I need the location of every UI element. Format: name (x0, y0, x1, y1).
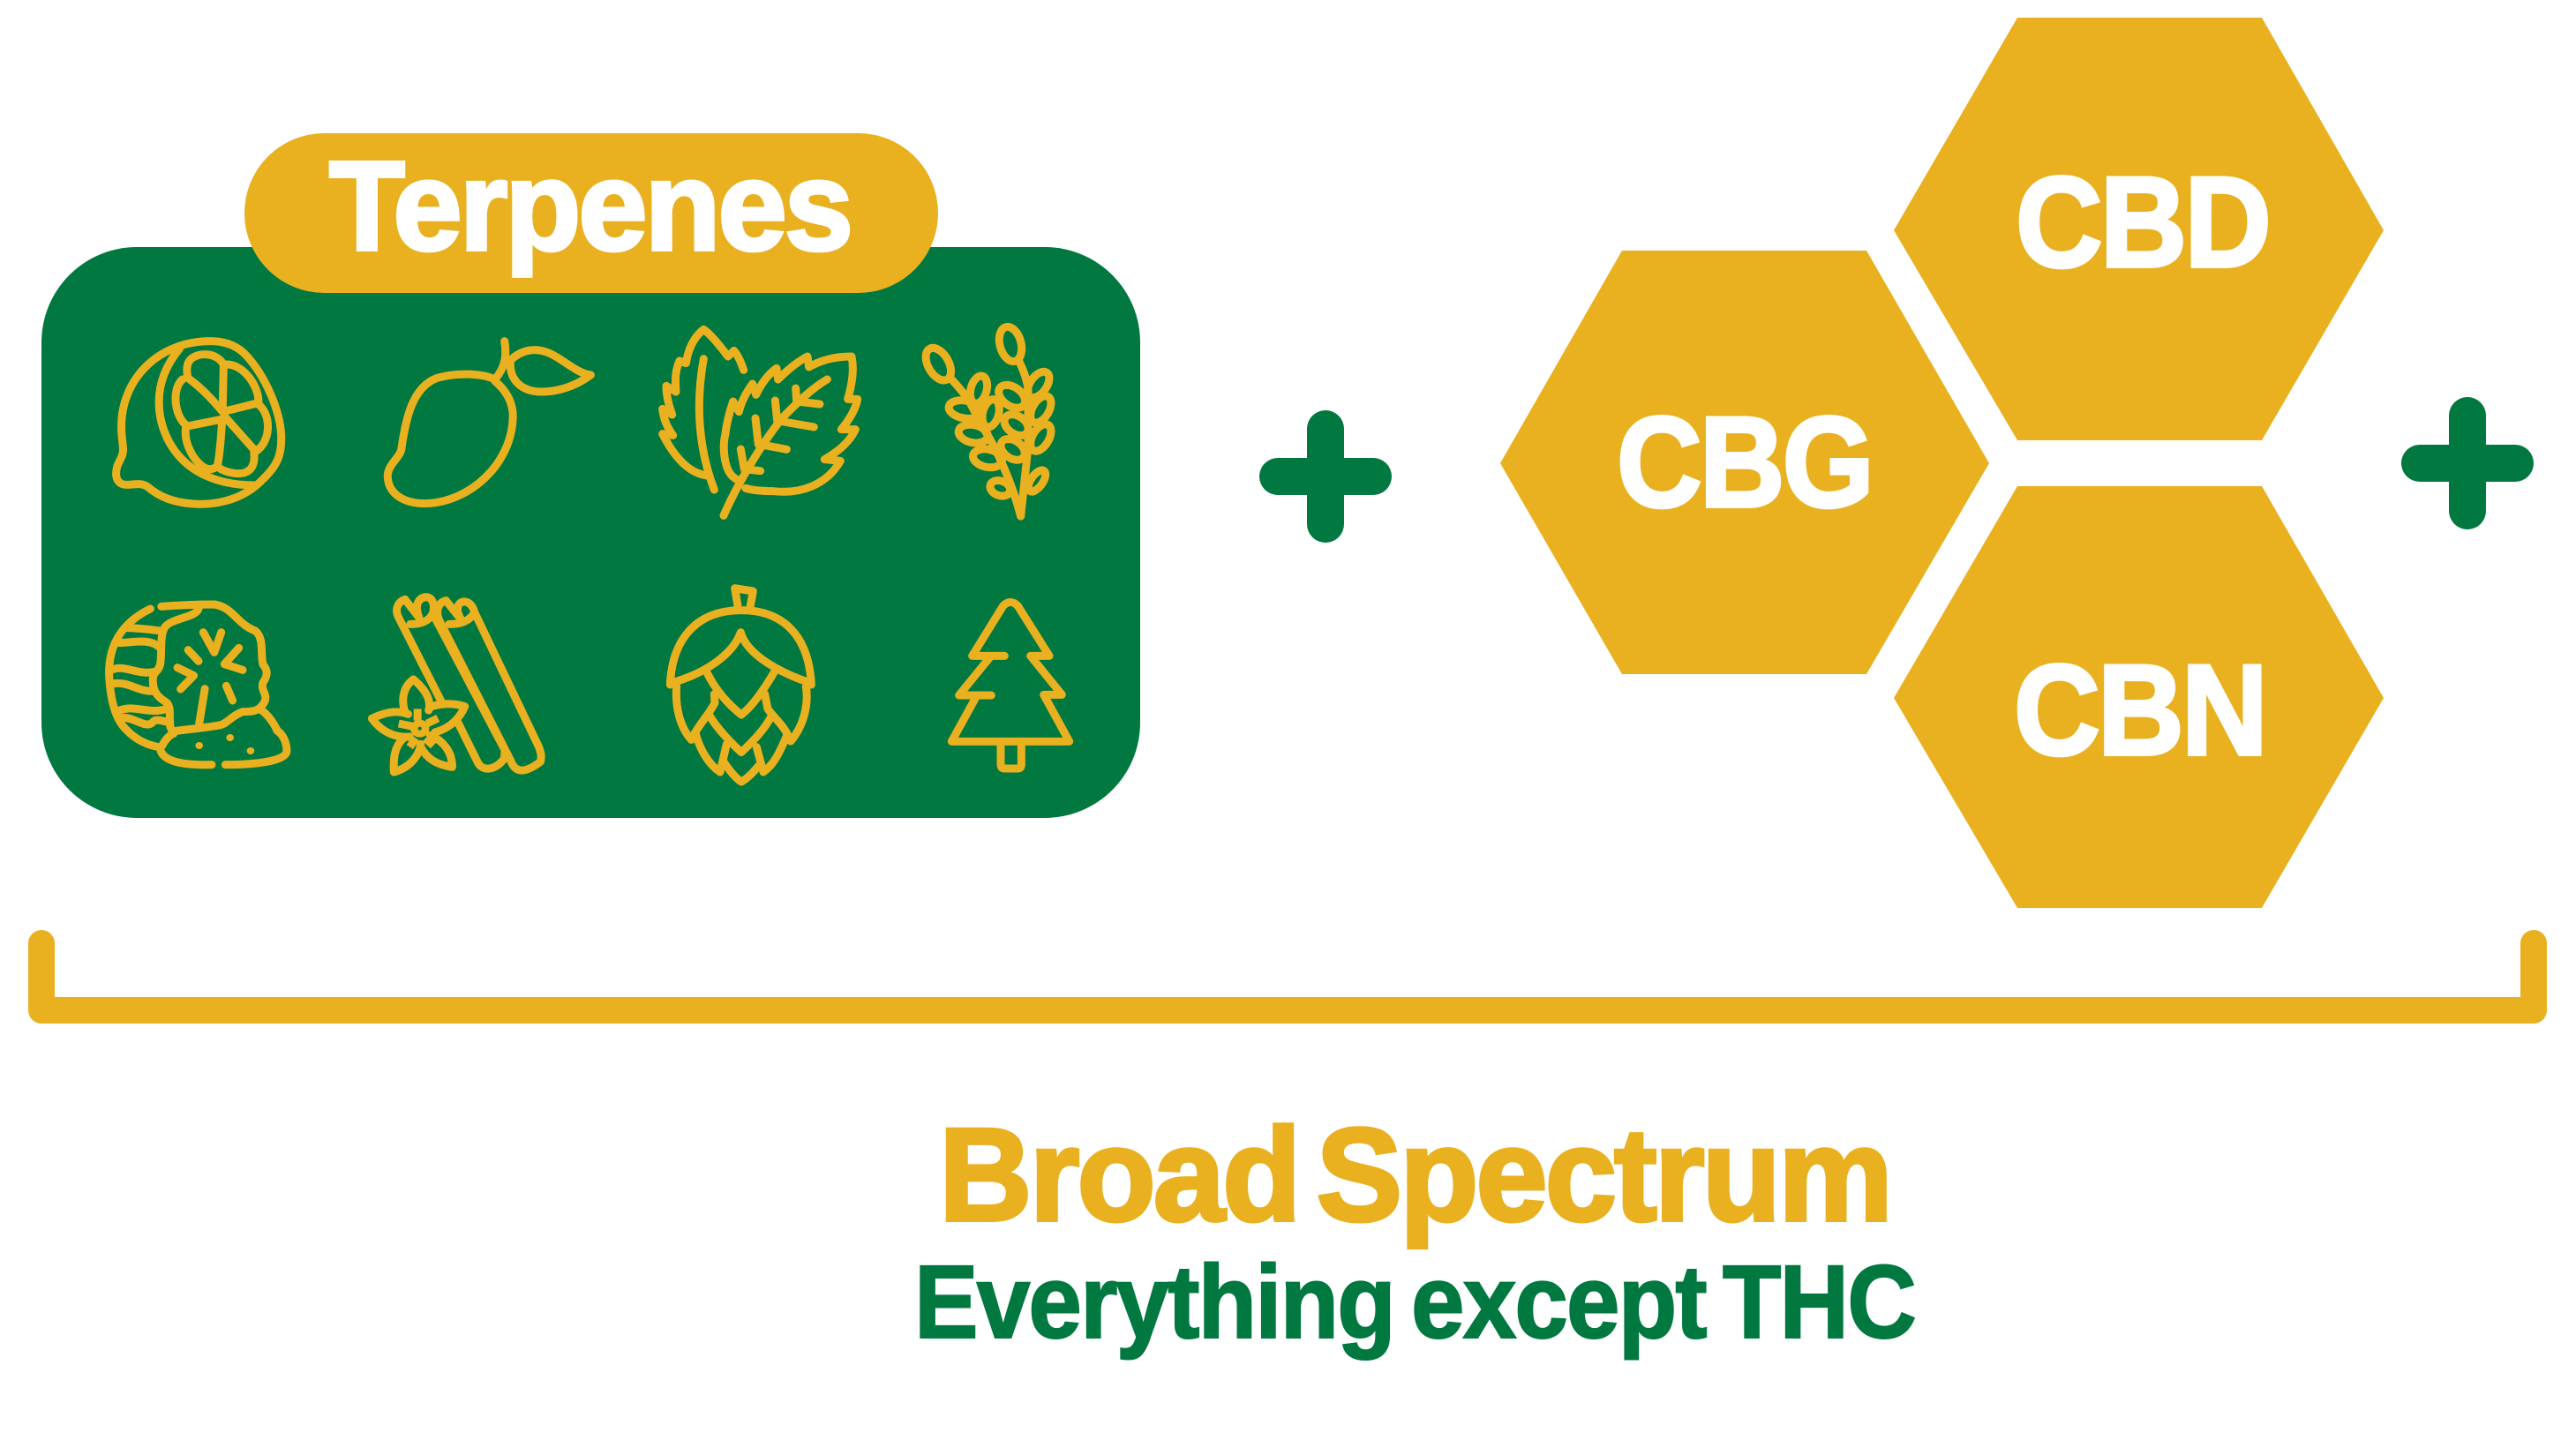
hexagon: CBD: CBD (2016, 150, 2269, 294)
hexagon: CBN (1894, 486, 2384, 908)
icon: nutmeg (109, 604, 287, 765)
icon: cinnamon sticks and star anise (372, 597, 541, 772)
icon: mango (387, 341, 590, 504)
heading pill: Terpenes: Terpenes (329, 135, 851, 277)
hexagon: CBG (1500, 251, 1989, 674)
icon: lemon (116, 341, 282, 504)
icon: herb sprig (920, 325, 1055, 516)
hexagon: CBD (1894, 18, 2384, 440)
title: Broad Spectrum: Broad Spectrum (939, 1100, 1890, 1249)
icon: hops (670, 589, 811, 782)
hexagon: CBN: CBN (2014, 638, 2265, 782)
heading pill: Terpenes (244, 133, 938, 293)
bracket (41, 943, 2534, 1010)
panel: terpenes (41, 133, 1140, 818)
subtitle: Everything except THC: Everything except THC (914, 1244, 1915, 1361)
panel background (41, 247, 1140, 818)
icon: leaves (663, 329, 858, 515)
icon: pine tree (951, 602, 1070, 769)
hexagon: CBG: CBG (1617, 390, 1872, 534)
icon: green plus left (1259, 410, 1392, 543)
icon: green plus right (2401, 397, 2534, 529)
